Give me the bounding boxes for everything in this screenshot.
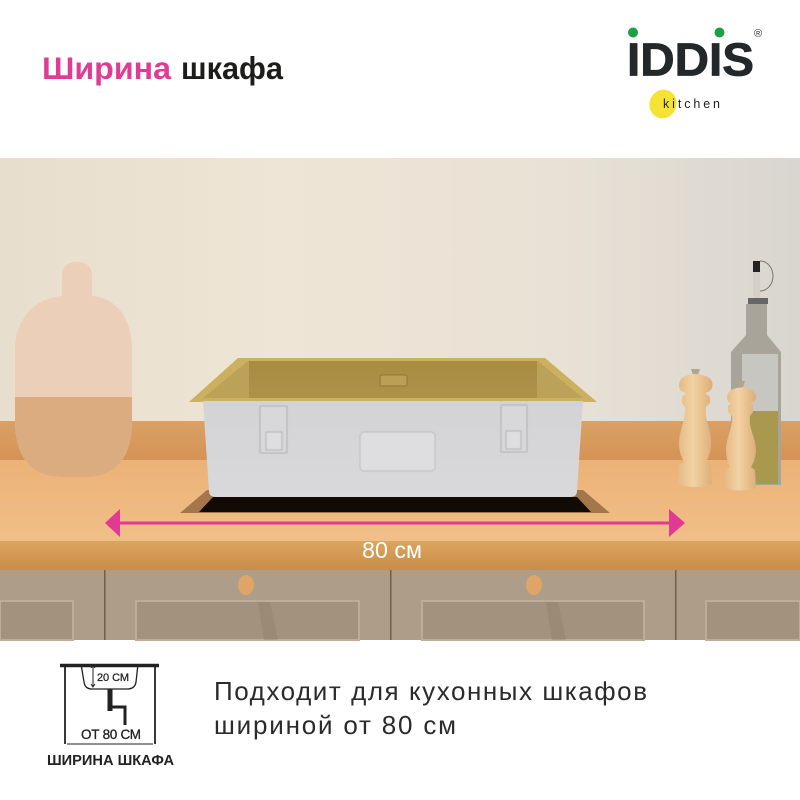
siphon [108,689,112,711]
logo: IDDIS kitchen [627,28,762,122]
icon: knob right [526,575,542,595]
left bracket [260,406,287,453]
wall [0,158,800,422]
description text: шириной от 80 см [214,710,456,740]
label plate [360,432,435,471]
description text: Подходит для кухонных шкафов [214,676,647,706]
logo: IDDIS kitchen: ® [754,28,762,40]
gold flange [189,358,597,402]
depth arrow [91,665,95,687]
backsplash [0,421,800,461]
overflow drain [380,375,407,386]
pepper mill small [724,381,756,490]
title: шкафа [181,50,283,86]
title: Ширина [42,50,171,86]
sink [189,358,597,497]
countertop edge [0,541,800,570]
sink bowl [81,664,138,689]
width label: ОТ 80 СМ [81,727,141,742]
description text [214,676,647,740]
cabinet walls [65,665,155,744]
cabinet width label: ШИРИНА ШКАФА [47,753,175,769]
icon: knob left [238,575,254,595]
sink body [203,401,583,497]
depth label: 20 СМ [97,672,129,684]
logo: IDDIS kitchen: kitchen [663,97,720,111]
title [42,50,283,86]
icon: sink cabinet diagram [47,664,175,769]
logo: IDDIS kitchen: IDDIS [627,34,754,86]
bottle of oil [731,261,781,485]
cabinet doors [0,570,800,640]
basin interior [203,361,583,398]
cutting board [15,262,132,477]
panel: kitchen photo [0,158,800,640]
right bracket [501,405,527,452]
width arrow [67,743,153,745]
cutout in countertop [180,490,610,513]
countertop line [60,664,159,667]
countertop [0,460,800,541]
pepper mill large [677,369,712,487]
arrow: width dimension [105,509,685,537]
dimension label: 80 см [362,537,422,563]
